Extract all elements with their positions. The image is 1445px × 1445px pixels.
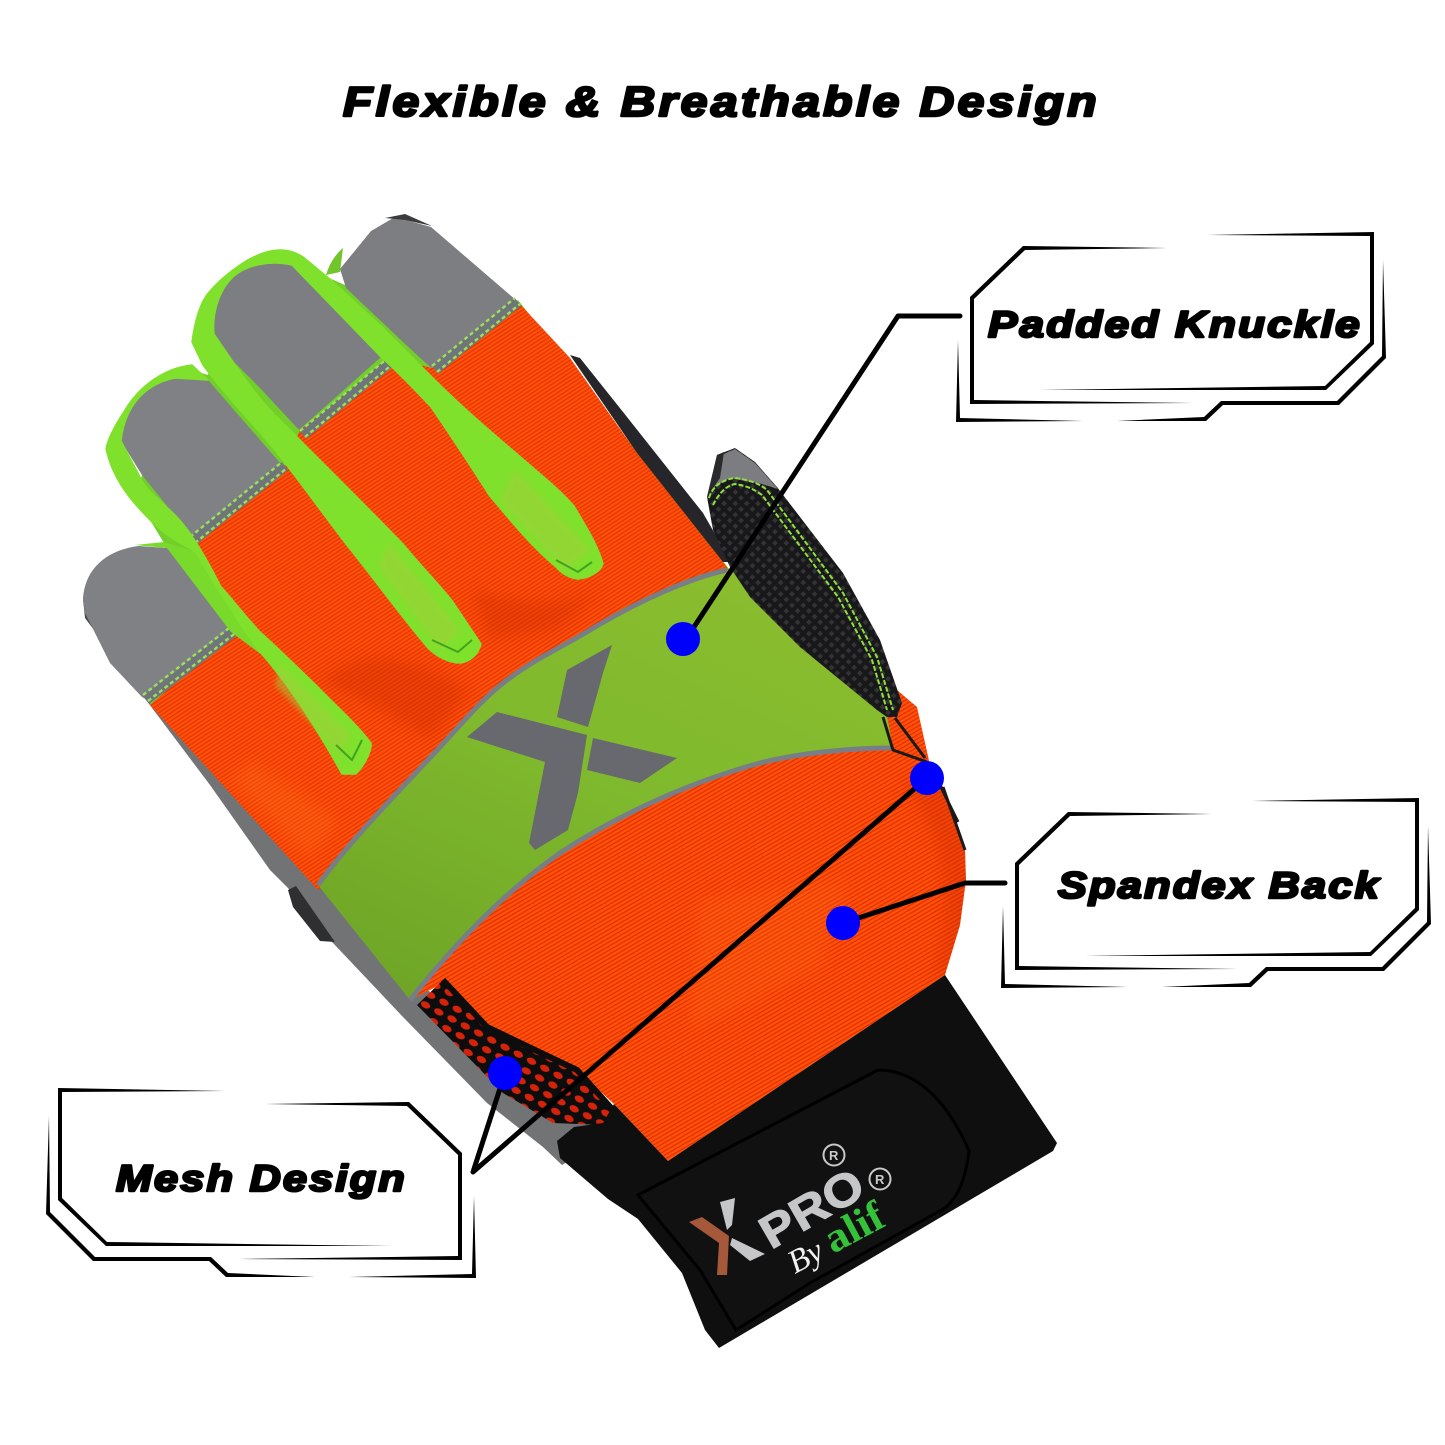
strip shading (275, 470, 590, 755)
index finger (340, 217, 517, 368)
brand logo (689, 1144, 893, 1281)
marker: mesh upper (910, 761, 944, 795)
brand logo: By (782, 1233, 830, 1281)
index tip dark edge (385, 214, 432, 226)
lower mesh (417, 980, 623, 1127)
callout: spandex back (1001, 798, 1431, 988)
finger underlay (140, 262, 730, 885)
label: mesh design: Mesh Design (116, 1158, 407, 1199)
glove (83, 214, 1057, 1348)
marker: padded knuckle (666, 622, 700, 656)
velcro tab (638, 1070, 969, 1330)
thumb stitching (709, 478, 893, 710)
marker: mesh lower (488, 1056, 522, 1090)
pinky finger (83, 546, 231, 701)
leader line: spandex back (843, 883, 1005, 923)
green wedge beside index tip (326, 248, 343, 275)
brand logo: PRO (750, 1158, 873, 1259)
palm side gray edge (83, 600, 620, 1165)
ring finger (121, 378, 281, 537)
green knuckle panel (318, 565, 893, 1000)
dark palm seam (288, 886, 335, 942)
thumb tip dark edge (707, 452, 724, 497)
mesh binding (443, 980, 613, 1110)
green strip: index finger piping (281, 250, 603, 579)
side mesh lines (883, 717, 965, 850)
lower orange spandex panel (400, 680, 980, 1170)
wrist cuff (557, 975, 1057, 1348)
upper orange panel (130, 290, 740, 900)
title: Flexible & Breathable Design (343, 78, 1100, 125)
green strip: middle finger piping (192, 250, 481, 663)
callout: mesh design (46, 1088, 476, 1278)
strip fold creases (336, 560, 592, 760)
leader line: padded knuckle (692, 316, 960, 630)
X logo on panel (467, 645, 677, 850)
stitching bands (143, 298, 520, 701)
thumb (707, 448, 902, 717)
dark fingertip edge (83, 598, 150, 695)
middle finger (206, 262, 381, 430)
brand logo: alif (816, 1193, 893, 1263)
marker: spandex back (826, 906, 860, 940)
callout: padded knuckle (956, 232, 1386, 422)
thumb tip (709, 449, 778, 490)
green piping along pinky (135, 542, 262, 655)
green strip: ring finger piping (106, 365, 371, 774)
brand logo: R (829, 1148, 839, 1163)
label: padded knuckle: Padded Knuckle (988, 304, 1362, 345)
leader line: mesh design (473, 778, 927, 1172)
back of thumb side band (570, 355, 731, 562)
label: spandex back: Spandex Back (1058, 865, 1381, 906)
brand logo: R (875, 1172, 885, 1187)
